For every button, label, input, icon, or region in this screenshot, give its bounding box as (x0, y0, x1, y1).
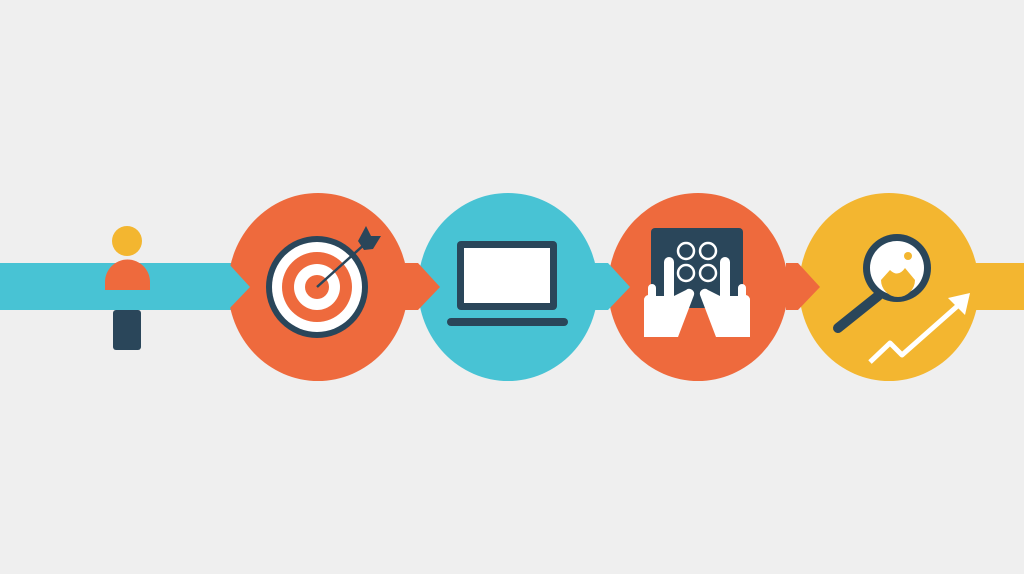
timeline band (0, 263, 1024, 310)
arrow: orange into analytics (786, 263, 820, 310)
arrow: blue band into target (200, 263, 250, 310)
step circle: tablet (608, 193, 788, 381)
icon: target (266, 226, 381, 338)
icon: laptop (447, 241, 568, 326)
icon: tablet with hands (644, 228, 750, 337)
arrow: blue into tablet (595, 263, 630, 310)
step circle: target (228, 193, 408, 381)
step circle: analytics (799, 193, 979, 381)
arrow: orange into laptop (405, 263, 440, 310)
icon: magnifier and growth arrow (838, 234, 970, 362)
step circle: laptop (418, 193, 598, 381)
icon: person (105, 226, 150, 350)
